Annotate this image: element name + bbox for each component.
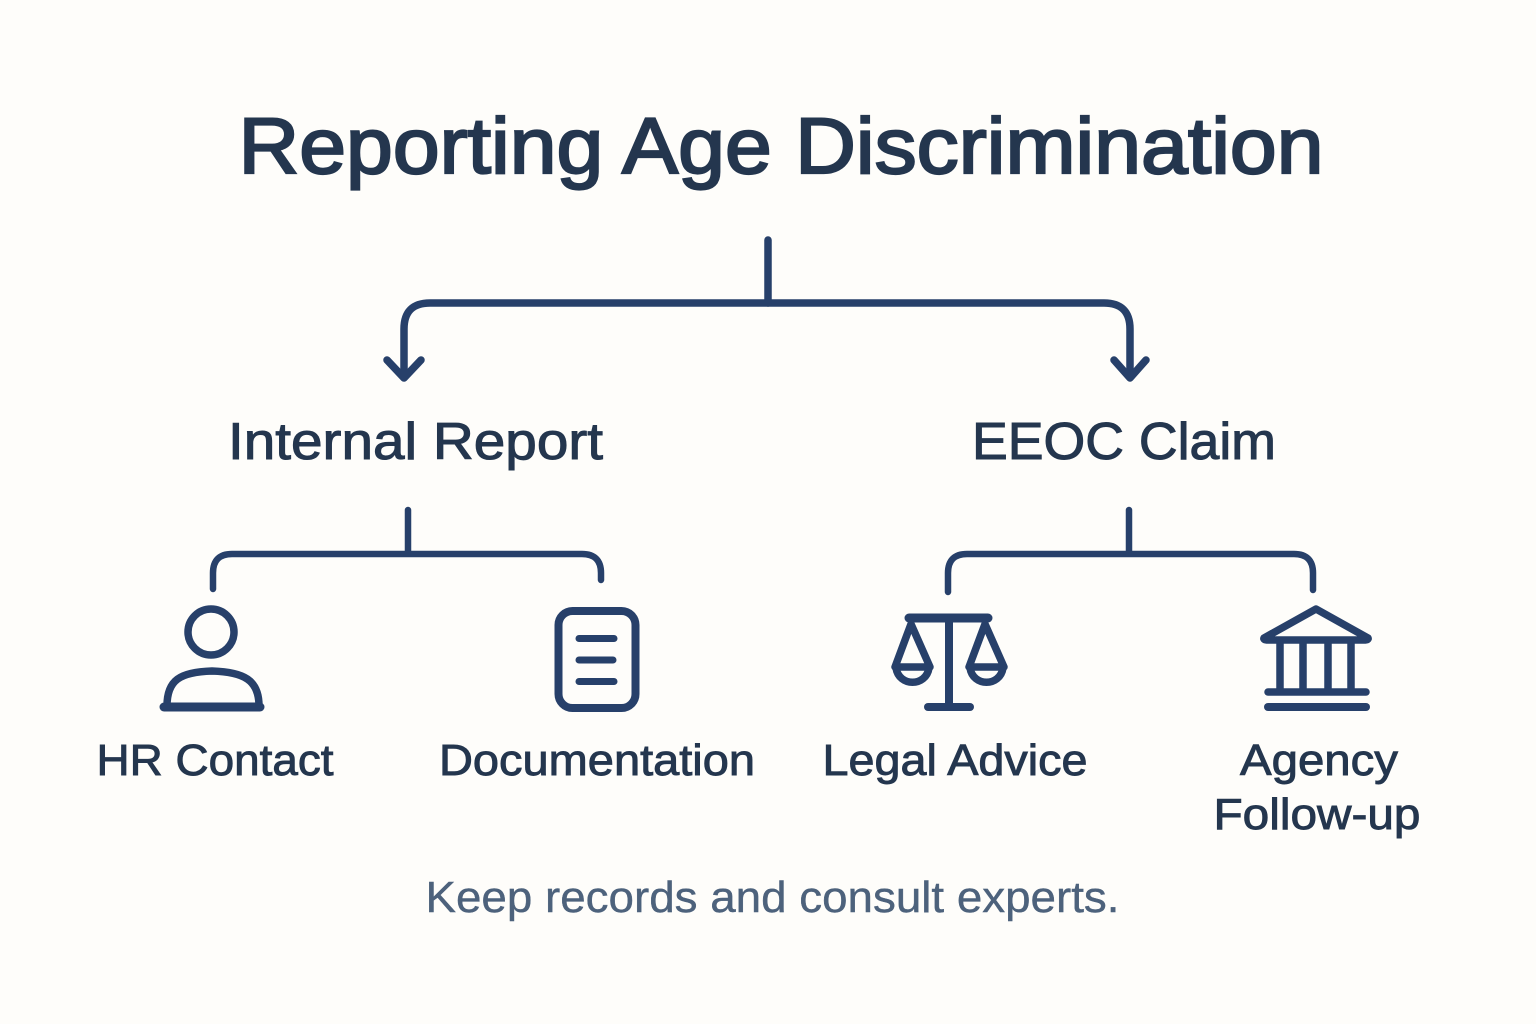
icon: government building: [1264, 609, 1368, 707]
icon: scales of justice: [895, 618, 1004, 707]
footer note: Keep records and consult experts.: [426, 873, 1120, 922]
heading: EEOC Claim: EEOC Claim: [972, 413, 1276, 471]
label: Legal Advice: Legal Advice: [822, 736, 1088, 785]
connector: Internal Report branches: [213, 510, 601, 589]
label: Agency Follow-up: [1214, 736, 1420, 839]
arrow: top split to both branches: [387, 240, 1146, 378]
heading: Internal Report: Internal Report: [228, 413, 604, 471]
icon: person: [164, 609, 260, 707]
title: Reporting Age Discrimination: [238, 101, 1324, 190]
connector: EEOC Claim branches: [948, 510, 1313, 592]
icon: document: [558, 611, 636, 708]
label: Agency Follow-up: Follow-up: [1214, 790, 1420, 839]
label: HR Contact: HR Contact: [96, 736, 334, 785]
label: Agency Follow-up: Agency: [1240, 736, 1398, 785]
label: Documentation: Documentation: [439, 736, 755, 785]
